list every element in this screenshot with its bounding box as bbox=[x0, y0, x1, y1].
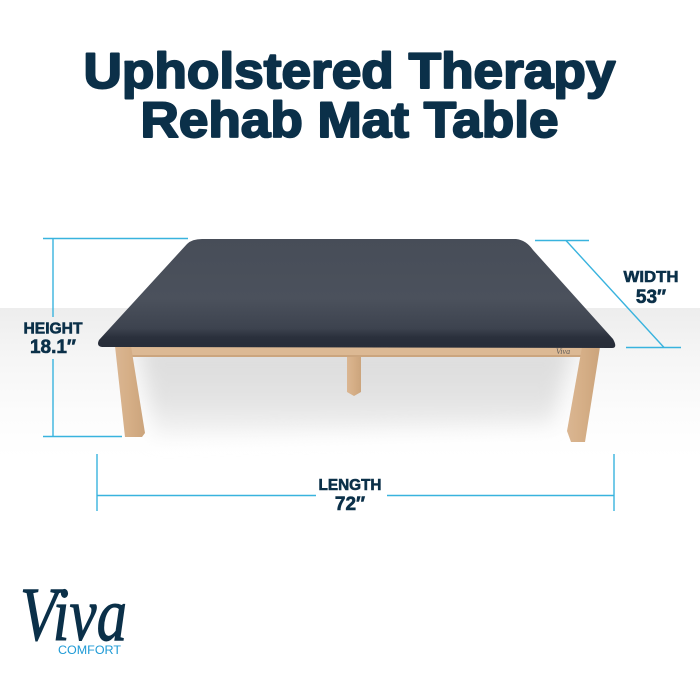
height label: HEIGHT bbox=[24, 320, 83, 338]
title bbox=[84, 43, 616, 148]
mat table bbox=[98, 239, 615, 442]
wooden rail bbox=[128, 346, 586, 357]
rail logo mark: Viva bbox=[556, 347, 570, 356]
logo: Viva Comfort: Viva bbox=[20, 573, 127, 657]
left leg bbox=[115, 346, 145, 437]
height dimension bbox=[24, 238, 188, 437]
width label bbox=[624, 269, 678, 308]
logo: Viva Comfort: COMFORT bbox=[58, 645, 121, 657]
length dimension bbox=[97, 454, 614, 515]
height label: 18.1″ bbox=[30, 337, 76, 358]
width label: WIDTH bbox=[624, 269, 678, 286]
length label: LENGTH bbox=[318, 477, 382, 494]
width dimension bbox=[535, 240, 681, 348]
right leg bbox=[567, 347, 600, 442]
floor shadow bbox=[140, 345, 572, 437]
upholstered top bbox=[98, 239, 615, 348]
floor background bbox=[0, 308, 700, 458]
title: Upholstered Therapy bbox=[84, 43, 616, 99]
title: Rehab Mat Table bbox=[140, 92, 558, 148]
height label bbox=[24, 320, 83, 358]
back middle leg bbox=[347, 356, 361, 396]
length label: 72″ bbox=[335, 494, 365, 515]
length label bbox=[318, 477, 382, 515]
width label: 53″ bbox=[636, 287, 666, 308]
